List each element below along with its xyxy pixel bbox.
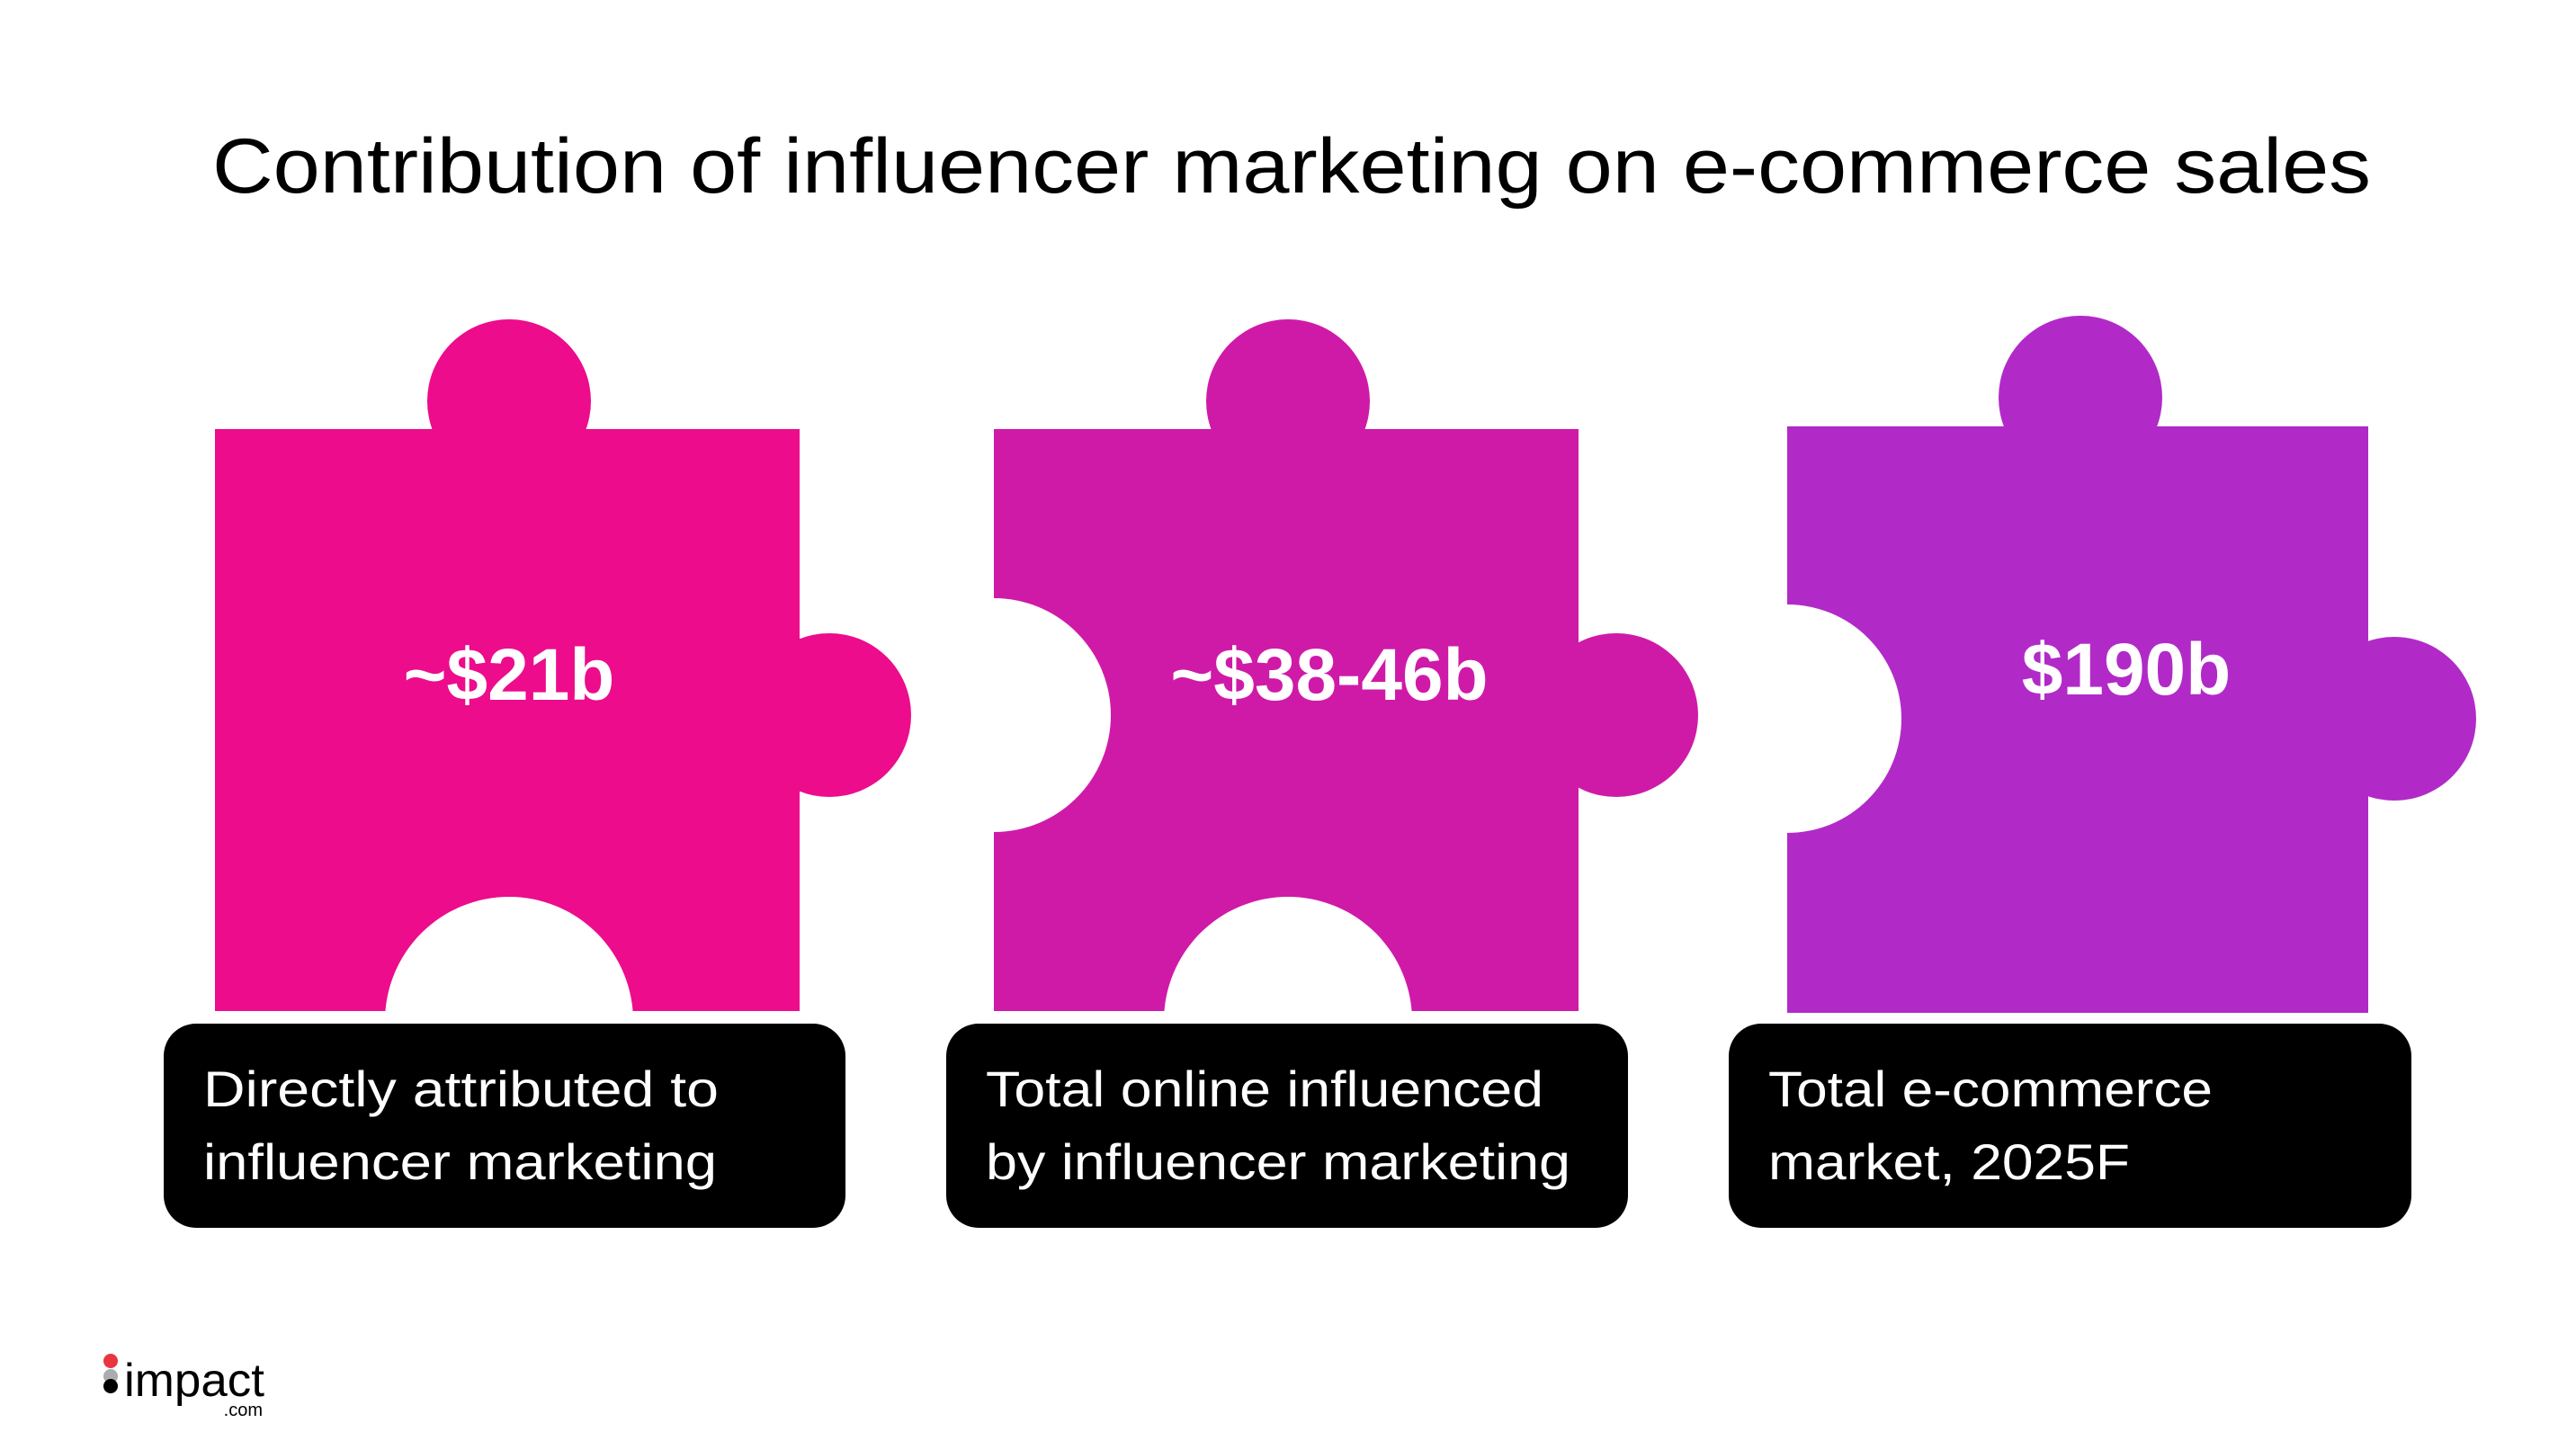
label box 1: influencer marketing: [203, 1133, 717, 1190]
value: ~$38-46b: ~$38-46b: [1170, 634, 1489, 716]
value: ~$21b: ~$21b: [404, 634, 614, 716]
label box 2: by influencer marketing: [986, 1133, 1570, 1190]
label box 3: market, 2025F: [1768, 1133, 2130, 1190]
puzzle piece 2: [877, 319, 1698, 1145]
puzzle piece 3: [1673, 316, 2476, 1013]
value: $190b: $190b: [2022, 629, 2231, 711]
logo: impact.com: .com: [224, 1401, 263, 1420]
puzzle piece 1: [215, 319, 911, 1145]
panel: piece 2: [877, 319, 1698, 1228]
logo: impact.com: impact: [124, 1355, 265, 1407]
panel: piece 1: [164, 319, 911, 1228]
label box 2: Total online influenced: [986, 1061, 1543, 1117]
label box 3: Total e-commerce: [1768, 1061, 2213, 1117]
label box 1: Directly attributed to: [203, 1061, 719, 1117]
title: Contribution of influencer marketing on e-commerce sales: [212, 123, 2371, 210]
label box 2: [946, 1024, 1628, 1228]
label box 1: [164, 1024, 845, 1228]
label box 3: [1729, 1024, 2411, 1228]
panel: piece 3: [1673, 316, 2476, 1228]
logo: impact.com: [103, 1354, 265, 1420]
